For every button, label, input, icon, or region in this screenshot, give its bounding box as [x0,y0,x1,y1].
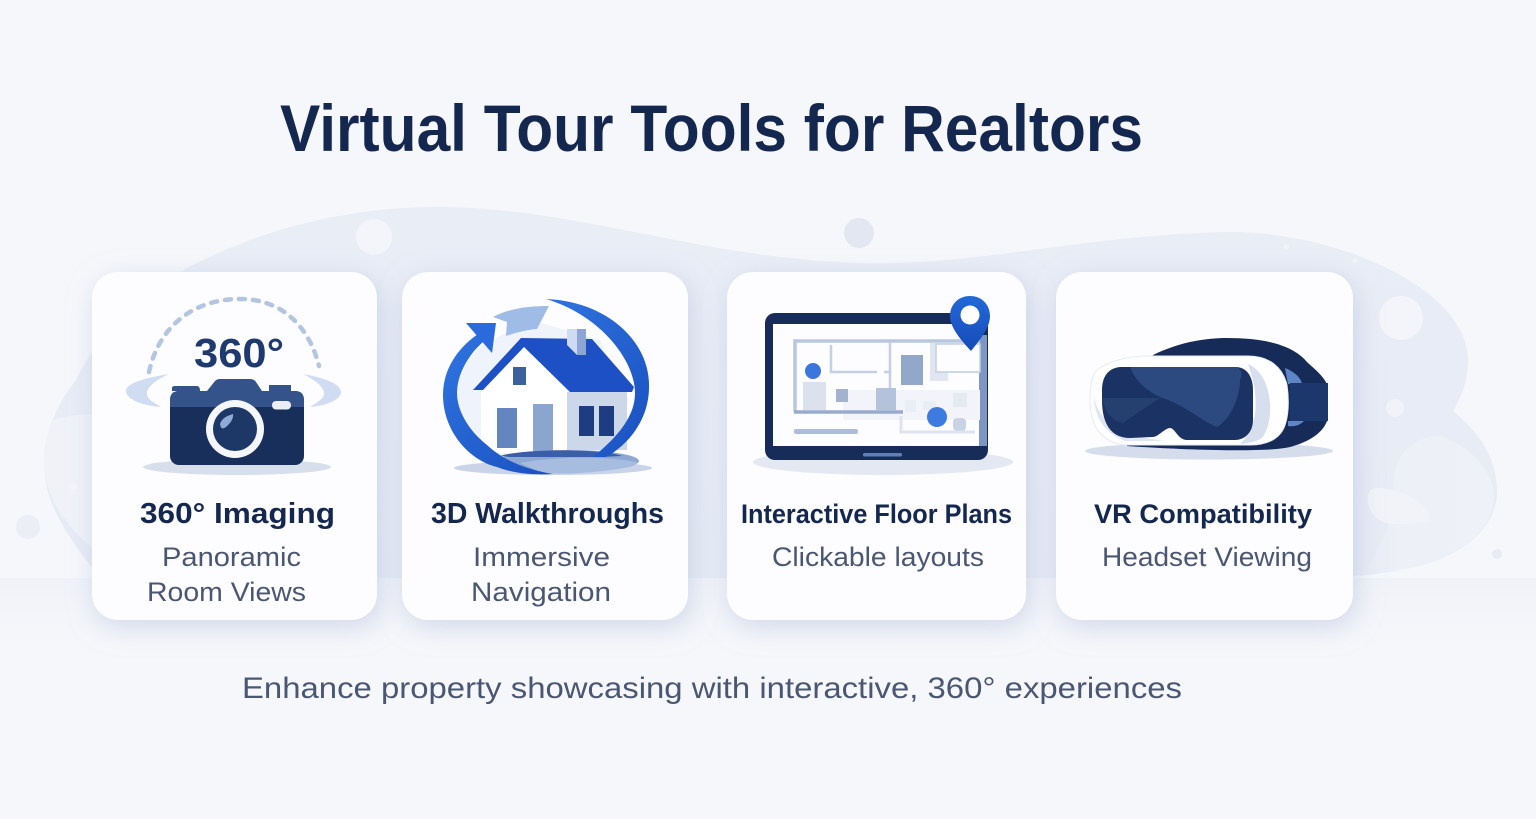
icon: house with circular arrow [443,299,652,475]
description [147,542,306,607]
icon: tablet floor plan with pin [753,296,1013,475]
panel: 360 imaging [92,272,377,620]
description: Room Views [147,577,306,607]
heading: 360° Imaging [140,498,335,530]
heading: 3D Walkthroughs [431,498,664,530]
description: Clickable layouts [772,542,984,572]
description: Panoramic [162,542,301,572]
panel: interactive floor plans [727,272,1026,620]
icon: location pin [950,296,990,351]
description: Immersive [473,542,610,572]
floor plan [794,341,980,434]
icon: 360 camera: 360° [194,330,284,376]
description [471,542,611,607]
description: Navigation [471,577,611,607]
heading: Interactive Floor Plans [741,499,1012,529]
title: Virtual Tour Tools for Realtors [280,91,1143,165]
tagline: Enhance property showcasing with interactive, 360° experiences [242,672,1182,705]
description: Headset Viewing [1102,542,1312,572]
background blob shape [16,207,1502,578]
background floor band [0,578,1536,648]
panel: VR compatibility [1056,272,1353,620]
icon: 360 camera [126,299,341,475]
heading: VR Compatibility [1094,499,1312,529]
panel: 3D walkthroughs [402,272,688,620]
icon: VR headset [1085,338,1333,460]
